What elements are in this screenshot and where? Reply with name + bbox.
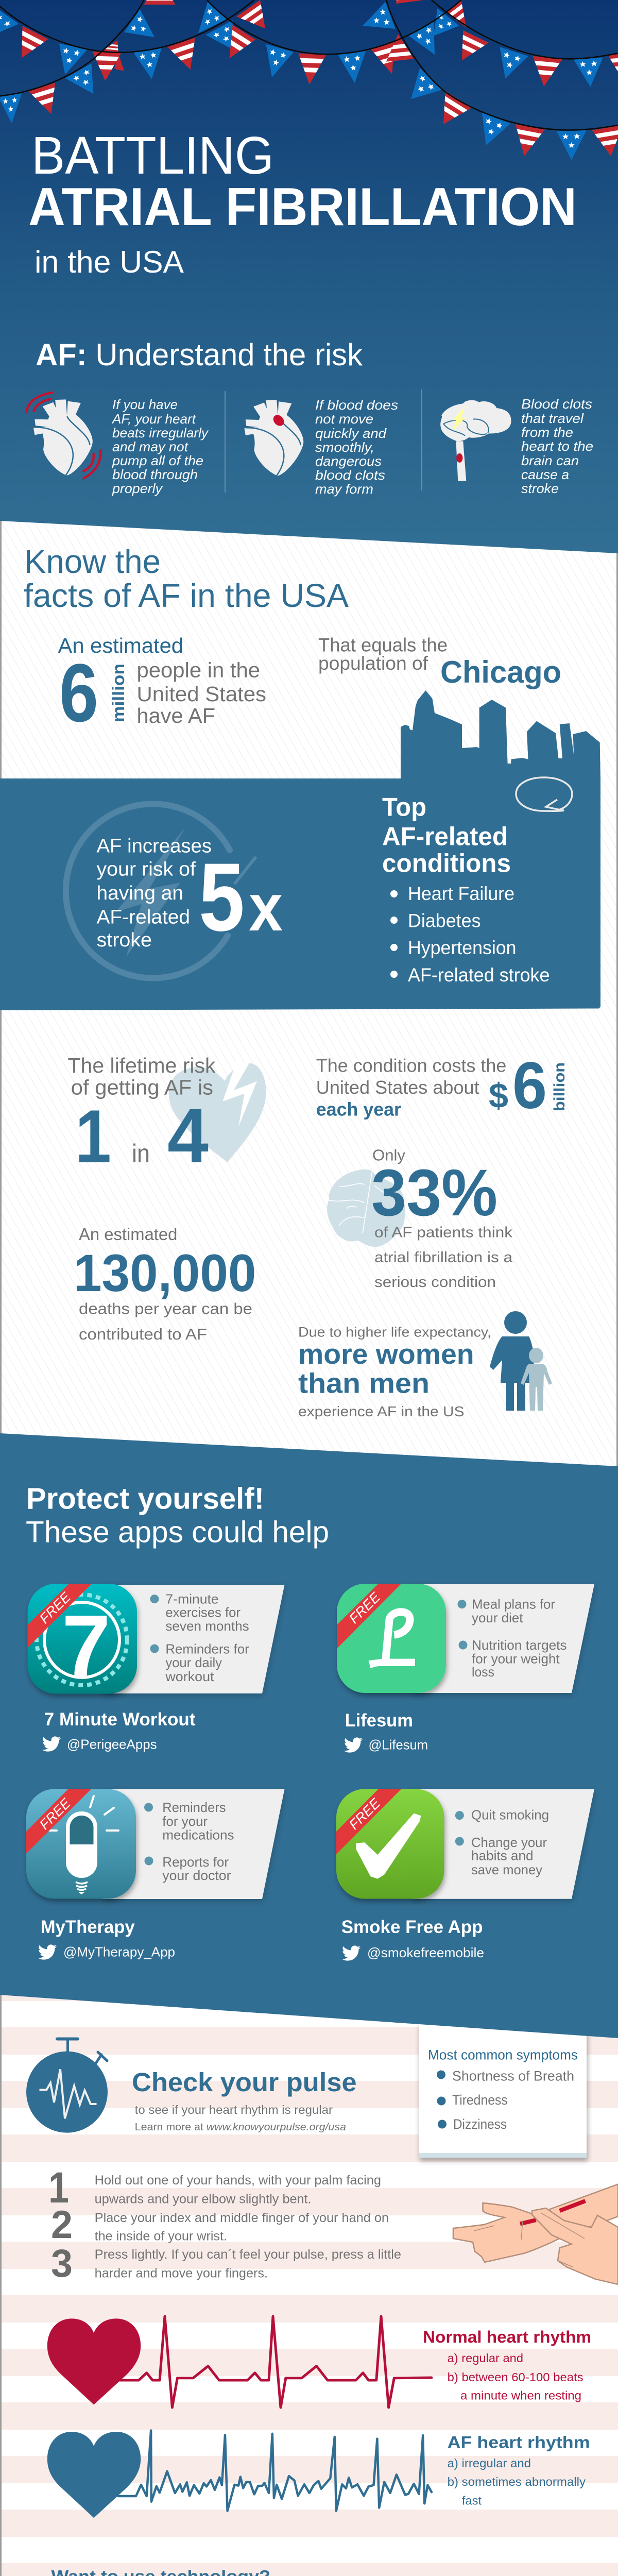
- text: mytherapy benefits: your doctor: [162, 1868, 231, 1883]
- stat: 5x: [199, 843, 283, 951]
- text: smoke free benefits: save money: [471, 1862, 542, 1877]
- fact: 6 million people: United States: [137, 682, 266, 706]
- fact: only 33 percent: atrial fibrillation is a: [374, 1249, 513, 1266]
- fact: cost 6 billion: United States about: [316, 1077, 479, 1098]
- text: risk 2: may form: [315, 481, 373, 497]
- fact: cost 6 billion: $: [489, 1076, 508, 1115]
- steps: how to check pulse: Press lightly. If you can´t feel your pulse, press a little: [95, 2247, 401, 2262]
- app card: MyTherapy: MyTherapy: [41, 1917, 135, 1937]
- text: smoke free benefits: [455, 1807, 549, 1877]
- fact: lifetime risk: in: [132, 1139, 150, 1168]
- text: risk 1: pump all of the: [112, 453, 203, 468]
- icon: lifesum: [337, 1584, 446, 1693]
- text: stroke risk: stroke: [97, 929, 152, 951]
- heading: top conditions: Top: [382, 792, 426, 821]
- text: stroke risk: having an: [97, 883, 183, 904]
- app card: 7 Minute Workout: [28, 1584, 284, 1752]
- text: mytherapy benefits: for your: [162, 1814, 208, 1829]
- text: risk 2: not move: [315, 411, 373, 427]
- fact: lifetime risk: 4: [167, 1092, 209, 1179]
- heading: top conditions: AF-related: [382, 822, 508, 851]
- icon: 7 minute workout: [28, 1584, 137, 1695]
- fact: more women than men: experience AF in the US: [298, 1403, 465, 1419]
- steps: how to check pulse: Place your index and middle finger of your hand on: [95, 2211, 389, 2225]
- illustration: hands checking pulse: [453, 2184, 618, 2284]
- text: normal rhythm: a minute when resting: [460, 2388, 581, 2402]
- fact: more women than men: [298, 1311, 552, 1419]
- stat: 5x: x: [249, 870, 283, 945]
- text: risk 3: from the: [521, 425, 573, 440]
- text: lifesum benefits: [457, 1596, 566, 1680]
- white hatched background: facts section: [0, 515, 618, 1473]
- steps: how to check pulse: upwards and your elbow slightly bent.: [95, 2192, 312, 2206]
- fact: 130,000 deaths: [74, 1225, 256, 1343]
- panel: stroke risk and top conditions: [0, 777, 600, 1010]
- text: risk 1: properly: [112, 481, 163, 496]
- icon: twitter bird: [344, 1737, 363, 1753]
- title: ATRIAL FIBRILLATION: [28, 177, 577, 237]
- fact: 130,000 deaths: deaths per year can be: [79, 1300, 252, 1318]
- text: risk 2: smoothly,: [315, 439, 374, 455]
- text: stroke risk: your risk of: [97, 858, 196, 880]
- steps: how to check pulse: 2: [51, 2203, 73, 2247]
- risk 3: stroke: [440, 396, 593, 496]
- icon: smoke free check: FREE: [346, 1795, 384, 1833]
- text: normal rhythm: a) regular and: [448, 2351, 523, 2365]
- list: top conditions: Heart Failure: [408, 883, 514, 904]
- heading: top conditions: conditions: [382, 849, 511, 878]
- list: top conditions: [390, 883, 550, 986]
- fact: only 33 percent: [327, 1146, 513, 1291]
- app card: MyTherapy: [26, 1789, 284, 1960]
- list: top conditions: Hypertension: [408, 937, 516, 958]
- app card: Smoke Free App: @smokefreemobile: [367, 1945, 484, 1960]
- text: AF rhythm: b) sometimes abnormally: [448, 2475, 586, 2488]
- text: stroke risk: AF-related: [97, 907, 190, 928]
- fact: 6 million people: 6: [59, 647, 98, 739]
- risk 1: irregular heartbeat: [26, 393, 209, 496]
- fact: population of Chicago: That equals the: [318, 635, 448, 655]
- text: risk 1: AF, your heart: [111, 411, 197, 427]
- text: 7 minute workout benefits: your daily: [165, 1655, 222, 1670]
- text: lifesum benefits: for your weight: [472, 1651, 560, 1667]
- fact: population of Chicago: Chicago: [440, 655, 561, 689]
- text: risk 3: brain can: [521, 453, 579, 468]
- app card: Lifesum: Lifesum: [345, 1710, 413, 1731]
- text: risk 3: heart to the: [521, 438, 593, 454]
- text: risk 2: [315, 397, 398, 497]
- heading: protect yourself: These apps could help: [26, 1516, 329, 1549]
- fact: 130,000 deaths: contributed to AF: [79, 1325, 207, 1343]
- icon: twitter bird: [342, 1945, 360, 1961]
- text: smoke free benefits: Change your: [471, 1835, 547, 1850]
- steps: how to check pulse: 1: [48, 2163, 69, 2212]
- fact: 130,000 deaths: 130,000: [74, 1244, 256, 1302]
- text: risk 3: that travel: [521, 411, 584, 426]
- icon: heart with clot: [244, 400, 303, 476]
- text: risk 2: blood clots: [315, 467, 385, 483]
- text: mytherapy benefits: Reports for: [162, 1854, 229, 1870]
- stripes background: pulse section: [0, 1974, 618, 2576]
- text: stroke risk: AF increases: [97, 836, 212, 857]
- fact: cost 6 billion: [316, 1049, 568, 1123]
- text: risk 1: If you have: [112, 397, 178, 412]
- text: risk 2: If blood does: [315, 397, 398, 413]
- app card: 7 Minute Workout: 7 Minute Workout: [44, 1709, 196, 1730]
- icon: woman and child: [490, 1311, 552, 1411]
- fact: 6 million people: have AF: [137, 704, 215, 727]
- fact: 6 million people: people in the: [137, 658, 260, 682]
- list: top conditions: AF-related stroke: [408, 964, 550, 986]
- header panel: [0, 0, 618, 553]
- text: lifesum benefits: your diet: [472, 1610, 523, 1625]
- text: AF rhythm: a) irregular and: [448, 2456, 531, 2470]
- text: risk 1: beats irregularly: [112, 425, 209, 440]
- icon: mytherapy pill: [26, 1789, 136, 1899]
- text: normal rhythm: Normal heart rhythm: [423, 2328, 591, 2346]
- icon: 7 minute workout: FREE: [37, 1589, 74, 1626]
- app card: Lifesum: @Lifesum: [369, 1737, 428, 1753]
- steps: how to check pulse: harder and move your fingers.: [95, 2266, 268, 2281]
- icon: smoke free check: [336, 1789, 444, 1899]
- text: lifesum benefits: Nutrition targets: [472, 1637, 566, 1653]
- card: most common symptoms: Tiredness: [452, 2092, 508, 2108]
- text: risk 3: stroke: [521, 481, 559, 496]
- title: in the USA: [35, 245, 184, 279]
- card: most common symptoms: Shortness of Breath: [452, 2069, 574, 2084]
- fact: cost 6 billion: The condition costs the: [316, 1055, 506, 1076]
- heading: check your pulse: [132, 2067, 357, 2133]
- fact: more women than men: than men: [298, 1367, 430, 1399]
- fact: more women than men: Due to higher life expectancy,: [298, 1325, 491, 1340]
- icon: mytherapy pill: FREE: [37, 1795, 74, 1833]
- heading: top conditions: [382, 792, 511, 878]
- stat: 5x: 5: [199, 843, 245, 951]
- text: smoke free benefits: habits and: [471, 1848, 534, 1863]
- text: risk 3: Blood clots: [521, 396, 592, 412]
- text: risk 3: cause a: [521, 467, 569, 482]
- text: 7 minute workout benefits: 7-minute: [165, 1591, 219, 1606]
- app card: 7 Minute Workout: @PerigeeApps: [67, 1737, 157, 1752]
- text: 7 minute workout benefits: [150, 1591, 249, 1684]
- card: most common symptoms: Most common symptoms: [428, 2047, 578, 2063]
- text: risk 1: [111, 397, 209, 496]
- steps: how to check pulse: Hold out one of your hands, with your palm facing: [95, 2173, 381, 2188]
- app card: Smoke Free App: [336, 1789, 594, 1961]
- icon: brain watermark: [327, 1169, 405, 1247]
- panel: protect yourself apps: [0, 1433, 618, 2038]
- icon: lifesum: FREE: [346, 1589, 384, 1626]
- card: most common symptoms: Dizziness: [453, 2116, 507, 2132]
- icon: red heart: [47, 2318, 141, 2404]
- icon: twitter bird: [42, 1736, 61, 1752]
- ecg line: normal: [118, 2316, 432, 2408]
- chart: normal heart rhythm: [47, 2316, 591, 2408]
- title: [28, 126, 577, 279]
- text: lifesum benefits: loss: [472, 1664, 494, 1680]
- icon: lightning circle watermark: [66, 804, 256, 978]
- text: risk 3: [521, 396, 593, 496]
- app card: Smoke Free App: Smoke Free App: [341, 1917, 483, 1937]
- text: stroke risk: [97, 836, 212, 951]
- text: smoke free benefits: Quit smoking: [471, 1807, 549, 1822]
- fact: lifetime risk: The lifetime risk: [68, 1054, 216, 1077]
- text: risk 2: dangerous: [315, 453, 382, 469]
- fact: only 33 percent: 33%: [371, 1156, 497, 1230]
- steps: how to check pulse: the inside of your wrist.: [95, 2229, 227, 2244]
- text: mytherapy benefits: Reminders: [162, 1800, 226, 1815]
- icon: beating heart: [26, 393, 100, 479]
- text: 7 minute workout benefits: seven months: [165, 1618, 249, 1634]
- heading: check your pulse: to see if your heart rhythm is regular: [135, 2103, 333, 2116]
- card: most common symptoms: [419, 2022, 587, 2158]
- icon: brain with lightning: [440, 400, 511, 481]
- text: normal rhythm: [423, 2328, 591, 2402]
- fact: only 33 percent: serious condition: [374, 1274, 496, 1291]
- app card: MyTherapy: @MyTherapy_App: [63, 1944, 175, 1960]
- text: 7 minute workout benefits: exercises for: [165, 1605, 241, 1620]
- fact: cost 6 billion: 6: [512, 1049, 547, 1123]
- text: normal rhythm: b) between 60-100 beats: [448, 2370, 583, 2384]
- fact: only 33 percent: Only: [372, 1146, 405, 1164]
- text: AF rhythm: [448, 2433, 590, 2507]
- text: lifesum benefits: Meal plans for: [472, 1596, 555, 1612]
- text: mytherapy benefits: medications: [162, 1827, 234, 1843]
- icon: broken heart watermark: [169, 1061, 266, 1162]
- ecg line: AF: [118, 2430, 432, 2511]
- heading: know the facts: [24, 543, 349, 614]
- fact: population of Chicago: [318, 635, 561, 689]
- fact: lifetime risk: [68, 1054, 266, 1179]
- heading: protect yourself: [26, 1482, 329, 1549]
- fact: more women than men: more women: [298, 1338, 474, 1370]
- text: AF rhythm: AF heart rhythm: [448, 2433, 590, 2451]
- heading: check your pulse: Learn more at www.knowyourpulse.org/usa: [135, 2121, 346, 2133]
- heading: know the facts: facts of AF in the USA: [24, 577, 349, 614]
- fact: 6 million people: [58, 634, 266, 739]
- bunting garlands: [0, 0, 618, 160]
- risk 2: blood clots: [244, 397, 398, 497]
- text: risk 1: blood through: [112, 467, 198, 482]
- heading: know the facts: Know the: [24, 543, 161, 580]
- illustration: Chicago skyline: [401, 690, 600, 779]
- heading: protect yourself: Protect yourself!: [26, 1482, 264, 1516]
- text: AF rhythm: fast: [462, 2494, 482, 2507]
- heading: check your pulse: Check your pulse: [132, 2067, 357, 2097]
- icon: twitter bird: [38, 1944, 57, 1960]
- fact: population of Chicago: population of: [318, 653, 428, 674]
- fact: cost 6 billion: billion: [551, 1062, 568, 1111]
- app card: Lifesum: [337, 1584, 594, 1753]
- text: risk 1: and may not: [112, 439, 189, 454]
- steps: how to check pulse: [48, 2163, 401, 2285]
- icon: blue heart: [47, 2432, 141, 2518]
- fact: 6 million people: An estimated: [58, 634, 183, 657]
- steps: how to check pulse: 3: [51, 2242, 73, 2285]
- icon: stopwatch with pulse: [26, 2039, 108, 2133]
- text: 7 minute workout benefits: Reminders for: [165, 1641, 249, 1657]
- icon: speech bubble outline: [516, 777, 572, 811]
- text: 7 minute workout benefits: workout: [165, 1669, 214, 1684]
- fact: 130,000 deaths: An estimated: [79, 1225, 177, 1244]
- fact: lifetime risk: 1: [75, 1094, 111, 1178]
- text: risk 2: quickly and: [315, 426, 387, 441]
- icon: 7 minute workout: 7: [62, 1597, 111, 1695]
- chart: AF heart rhythm: [47, 2430, 590, 2518]
- list: top conditions: Diabetes: [408, 910, 481, 931]
- title: BATTLING: [31, 126, 274, 185]
- fact: lifetime risk: of getting AF is: [71, 1076, 213, 1099]
- fact: cost 6 billion: each year: [316, 1099, 401, 1120]
- heading: understand the risk: AF: Understand the risk: [36, 337, 363, 372]
- fact: only 33 percent: of AF patients think: [374, 1224, 513, 1241]
- fact: 6 million people: million: [109, 664, 128, 722]
- text: mytherapy benefits: [144, 1800, 234, 1883]
